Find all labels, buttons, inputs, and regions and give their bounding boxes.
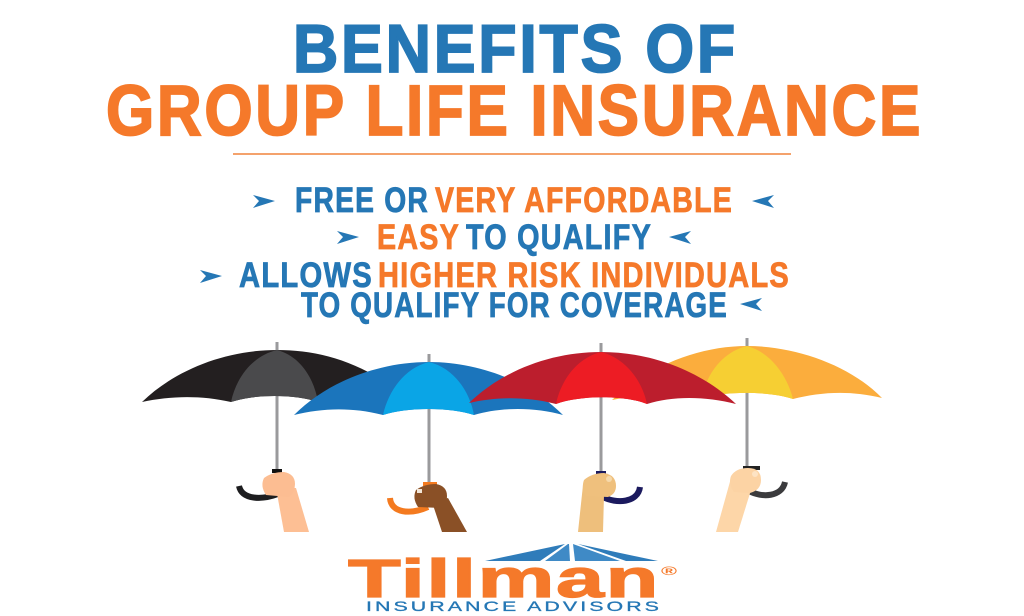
- blue umbrella: [294, 354, 563, 532]
- registered mark: ®: [661, 564, 677, 578]
- benefits list: [200, 181, 790, 325]
- yellow umbrella: [612, 338, 882, 532]
- umbrella illustration: [142, 338, 882, 532]
- logo: Tillman Insurance Advisors: [348, 544, 677, 614]
- benefit: higher risk individuals: HIGHER RISK INDIVIDUALS: [378, 256, 790, 295]
- title: GROUP LIFE INSURANCE: [106, 72, 923, 151]
- tagline: INSURANCE ADVISORS: [366, 598, 662, 614]
- benefit: higher risk individuals: TO QUALIFY FOR COVERAGE: [301, 286, 728, 325]
- benefit: easy to qualify: EASY: [377, 218, 460, 257]
- benefit: free or very affordable: [253, 181, 774, 220]
- benefit: free or very affordable: FREE OR: [295, 181, 429, 220]
- benefit: higher risk individuals: [200, 256, 790, 325]
- benefit: free or very affordable: VERY AFFORDABLE: [435, 181, 733, 220]
- title: BENEFITS OF: [293, 11, 738, 87]
- red umbrella: [469, 343, 736, 532]
- benefit: higher risk individuals: ALLOWS: [239, 256, 373, 295]
- benefit: easy to qualify: [337, 218, 691, 257]
- wordmark: Tillman: [348, 549, 660, 609]
- black umbrella: [142, 342, 412, 532]
- benefit: easy to qualify: TO QUALIFY: [466, 218, 652, 257]
- title: [106, 11, 923, 151]
- icon: roof: [485, 544, 658, 561]
